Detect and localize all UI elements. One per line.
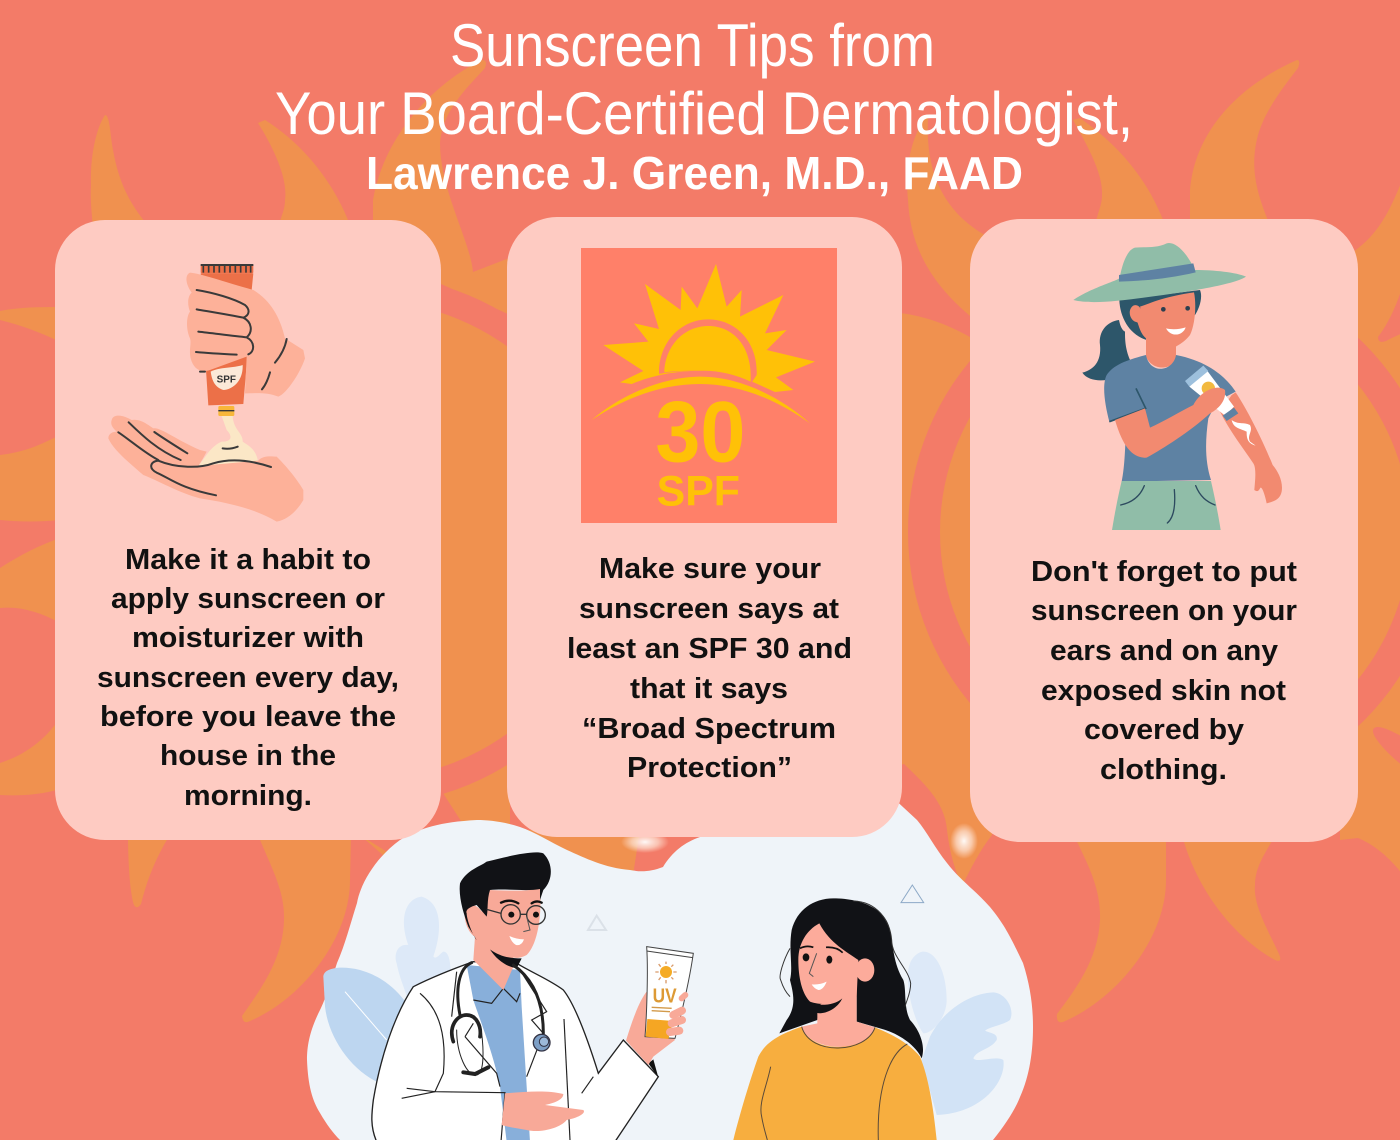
tip 3 text: ears and on any (1050, 635, 1278, 667)
title line 2: Your Board-Certified Dermatologist, (275, 80, 1133, 147)
shorts pockets (1121, 486, 1215, 523)
stethoscope (452, 963, 550, 1075)
tip 1 text: Make it a habit to (125, 544, 371, 576)
sunscreen tube (1185, 366, 1238, 421)
upper hand (186, 273, 305, 397)
tip 1 text: moisturizer with (132, 622, 364, 654)
sun rays (603, 264, 815, 392)
blue leaf (323, 968, 407, 1083)
cream squiggle (1232, 420, 1256, 446)
icon: hands applying SPF (108, 264, 305, 522)
t-shirt (1104, 355, 1236, 482)
tip 3 text: sunscreen on your (1031, 595, 1297, 627)
label: SPF (217, 374, 236, 385)
tip 2 text: Protection” (627, 752, 792, 784)
panel: tip 3 (970, 219, 1358, 842)
sunscreen tube: UV (653, 985, 677, 1007)
ponytail (1082, 320, 1130, 380)
eyes and smile (1161, 306, 1190, 335)
panel: tip 2 (507, 217, 902, 837)
beard shadow (490, 949, 522, 968)
tip 2 text: “Broad Spectrum (582, 713, 836, 745)
label (211, 365, 243, 390)
triangle accent (588, 916, 606, 930)
card 2 background (507, 217, 902, 837)
chin shadow (803, 998, 842, 1013)
shorts (1112, 481, 1221, 530)
leaves behind patient (908, 952, 1011, 1115)
logo square (581, 248, 837, 523)
subtitle: doctor name: Lawrence J. Green, M.D., FAAD (366, 147, 1023, 199)
doctor (323, 852, 693, 1140)
eyes, brows, nose and smile (800, 946, 843, 990)
SPF value: 30 (655, 385, 745, 481)
triangle accent (901, 885, 924, 903)
SPF label: SPF (657, 468, 740, 516)
tip 3 text (1031, 556, 1297, 786)
ear (856, 958, 874, 982)
tip 1 text: before you leave the (100, 701, 396, 733)
tip 2 text: Make sure your (599, 553, 821, 585)
backdrop blob (307, 795, 1033, 1140)
illustration: doctor and patient scene (307, 795, 1033, 1140)
sweater (733, 1027, 937, 1140)
horizon swoosh (592, 377, 810, 423)
sweater seams (761, 1027, 907, 1140)
tip 3 text: covered by (1084, 714, 1244, 746)
tip 3 text: clothing. (1100, 754, 1227, 786)
white coat (372, 962, 658, 1140)
tip 3 text: Don't forget to put (1031, 556, 1297, 588)
tip 2 text: least an SPF 30 and (567, 633, 852, 665)
hair back (1119, 290, 1201, 340)
glasses (487, 905, 545, 924)
sunscreen tube (645, 947, 693, 1039)
coat lines (402, 970, 593, 1140)
tip 1 text: house in the (160, 740, 336, 772)
title line 1: Sunscreen Tips from (450, 12, 935, 79)
card 3 background (970, 219, 1358, 842)
holding hand (626, 992, 675, 1065)
palm lines (118, 422, 271, 495)
tip 1 text: morning. (184, 780, 312, 812)
shirt (467, 965, 530, 1140)
icon: woman applying sunscreen (1073, 243, 1282, 530)
eyes, brows, nose and smile (501, 901, 542, 945)
patient (733, 885, 1011, 1140)
front arm and hand (1115, 388, 1225, 458)
hat (1073, 243, 1246, 302)
sunscreen cream (198, 416, 258, 466)
right arm (1220, 392, 1282, 503)
title (275, 12, 1133, 199)
hair (460, 852, 551, 940)
tip 1 text (97, 544, 399, 812)
tip 1 text: apply sunscreen or (111, 583, 385, 615)
lower hand (502, 1092, 584, 1131)
tip 2 text: that it says (630, 673, 788, 705)
nozzle (218, 406, 234, 416)
leaf behind doctor (396, 897, 451, 997)
neck and face (465, 888, 541, 990)
background sun glints (621, 823, 978, 859)
tip 2 text: sunscreen says at (579, 593, 839, 625)
hair outlines (780, 901, 911, 1007)
lower hand (108, 416, 303, 522)
sun disc with ring (659, 319, 757, 383)
tube body (201, 273, 253, 405)
tube cap (201, 264, 253, 273)
neck (802, 980, 875, 1047)
tip 2 text (567, 553, 852, 784)
hair (779, 898, 923, 1058)
face and neck (1130, 292, 1195, 368)
sleeve line (1109, 388, 1146, 422)
finger lines (196, 290, 287, 389)
face (798, 923, 858, 1004)
icon: SPF 30 sun logo (581, 248, 837, 523)
panel: tip 1 (55, 220, 441, 840)
tip 3 text: exposed skin not (1041, 675, 1286, 707)
cuff (648, 1059, 658, 1077)
fingers (670, 995, 685, 1032)
tip 1 text: sunscreen every day, (97, 662, 399, 694)
card 1 background (55, 220, 441, 840)
